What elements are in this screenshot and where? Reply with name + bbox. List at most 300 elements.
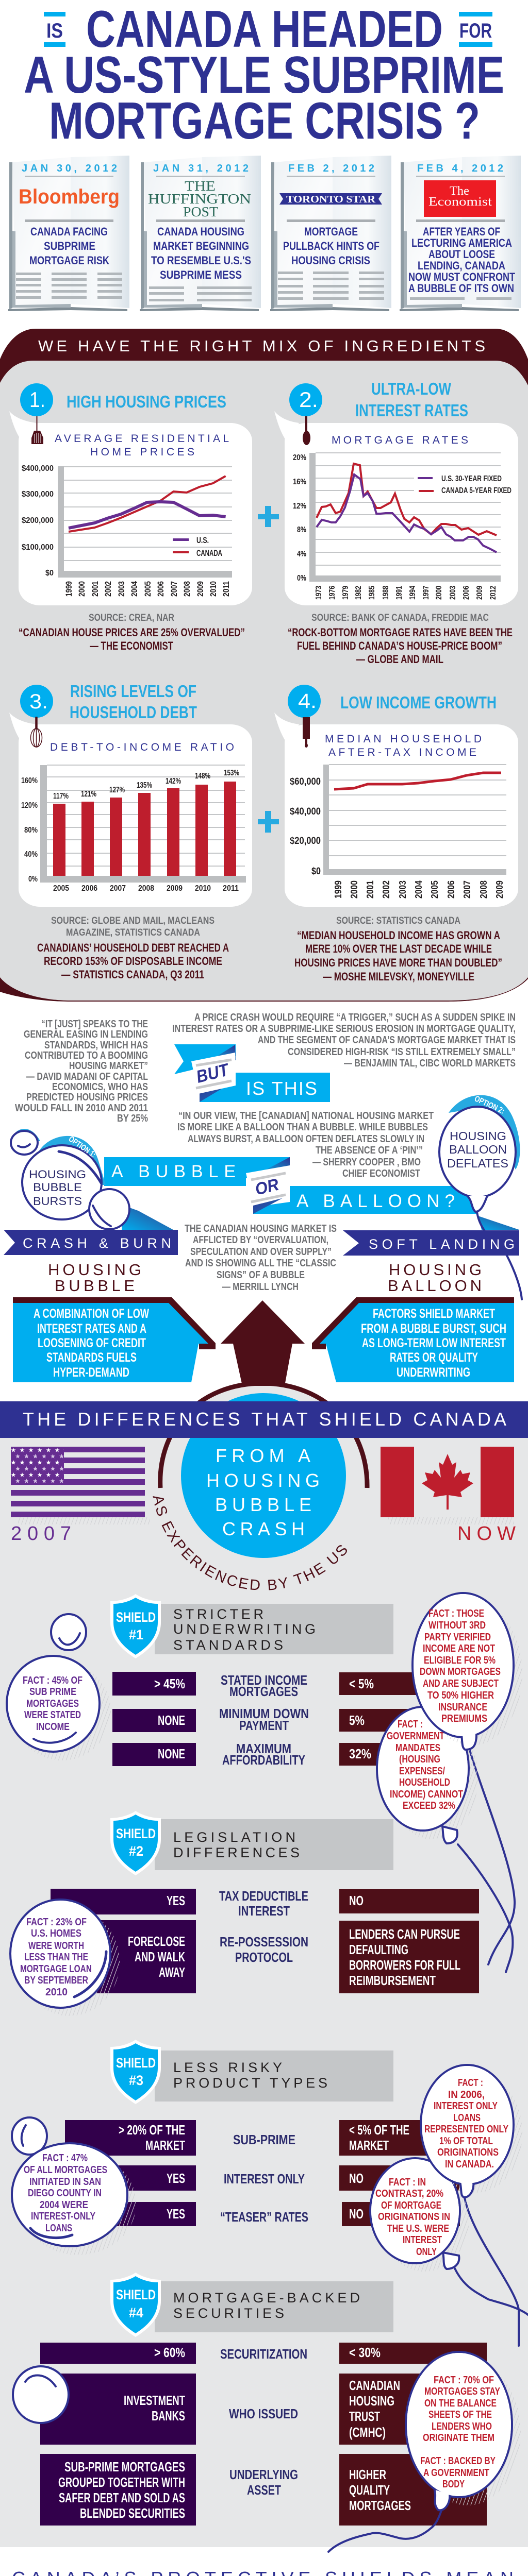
line chart: mortgage rates: 8% [297, 526, 306, 534]
chart panel 1: high housing prices [9, 383, 252, 652]
line chart: median income: 2005 [430, 880, 440, 899]
chart title: MORTGAGE RATES [332, 434, 468, 446]
callout: option 1 bubble crash and burn: HOUSING [29, 1168, 86, 1181]
table: shield 1 rows: MINIMUM DOWN [219, 1706, 309, 1721]
source and quote: CANADIANS’ HOUSEHOLD DEBT REACHED A [37, 941, 229, 954]
source and quote [37, 916, 229, 981]
table: shield 4 rows: (CMHC) [349, 2425, 386, 2440]
callout: fact in contrast balloon [370, 2158, 469, 2272]
panel: shield 1 header: STANDARDS [173, 1637, 283, 1653]
heading: housing balloon: BALLOON [388, 1277, 482, 1295]
callout: fact 45% balloon: INCOME [36, 1721, 70, 1733]
line chart: mortgage rates: U.S. 30-YEAR FIXED [441, 474, 502, 483]
heading: housing bubble [48, 1261, 141, 1295]
callout: fact 47% balloon: 2004 WERE [40, 2199, 88, 2211]
line chart: mortgage rates: 1985 [368, 586, 376, 600]
table: shield 2 rows: AWAY [159, 1964, 185, 1980]
panel: shield 3 header [110, 2040, 393, 2104]
table: shield 4 rows: BANKS [152, 2408, 185, 2424]
source and quote [288, 613, 513, 666]
quote: David Madani: CONTRIBUTED TO A BOOMING [25, 1050, 148, 1061]
callout: fact 70% balloon [328, 2352, 521, 2552]
bar chart: debt-to-income: 2006 [81, 884, 97, 893]
table: shield 3 rows: YES [167, 2171, 185, 2186]
ribbon: a bubble or a balloon: OR [253, 1175, 280, 1199]
table: shield 3 rows: “TEASER” RATES [220, 2209, 308, 2225]
callout: fact third party income balloon: PREMIUMS [441, 1713, 487, 1724]
callout: from a housing bubble crash: FROM A [216, 1445, 310, 1466]
line chart: home prices: 2008 [182, 581, 192, 597]
panel: newspaper Huffington Post: SUBPRIME MESS [160, 268, 242, 281]
chart panel 1: high housing prices: 1. [29, 387, 45, 412]
panel: newspaper Toronto Star: TORONTO STAR [286, 194, 376, 205]
table: shield 3 rows: < 5% OF THE [349, 2122, 409, 2138]
callout: option 2 balloon soft landing [343, 1094, 522, 1299]
bar chart: debt-to-income: 117% [53, 792, 69, 801]
icon: empty bubble [13, 2366, 69, 2423]
table: shield 2 rows: YES [167, 1893, 185, 1908]
heading: high housing prices: HIGH HOUSING PRICES [67, 392, 226, 411]
callout: option 2 balloon soft landing: HOUSING [450, 1129, 506, 1143]
source and quote: SOURCE: BANK OF CANADA, FREDDIE MAC [311, 613, 489, 623]
callout: fact 70% balloon: MORTGAGES STAY [424, 2386, 501, 2397]
panel: shield 2 header: SHIELD [116, 1826, 156, 1841]
callout: fact 70% balloon: FACT : BACKED BY [420, 2455, 496, 2467]
panel: ingredients arch [0, 329, 528, 1002]
icon: plus sign [258, 811, 279, 833]
quote: Sherry Cooper: — SHERRY COOPER , BMO [312, 1157, 421, 1168]
callout: fact government mandates balloon: (HOUSING [399, 1754, 440, 1765]
table: shield 3 rows: NO [349, 2206, 364, 2222]
panel: housing bubble description: A COMBINATION OF LOW [34, 1307, 149, 1321]
callout: option 1 bubble crash and burn: OPTION 1: [67, 1134, 97, 1160]
heading: ultra-low interest rates: ULTRA-LOW [371, 379, 452, 398]
callout: from a housing bubble crash: HOUSING [206, 1470, 320, 1491]
callout: fact third party income balloon: TO 50% HIGHER [427, 1690, 494, 1701]
quote: David Madani: ECONOMICS, WHO HAS [52, 1081, 148, 1093]
table: shield 1 rows [112, 1672, 422, 1768]
panel: housing bubble description: STANDARDS FUELS [46, 1350, 137, 1365]
table: shield 4 rows: CANADIAN [349, 2378, 400, 2393]
bar chart: debt-to-income [21, 765, 246, 893]
table: shield 2 rows: PROTOCOL [235, 1950, 293, 1965]
line chart: mortgage rates [293, 453, 517, 600]
bar chart: debt-to-income: 40% [24, 850, 38, 859]
callout: fact 70% balloon: SHEETS OF THE [428, 2409, 492, 2420]
callout: fact 70% balloon: FACT : 70% OF [434, 2375, 494, 2386]
line chart: home prices: 2010 [208, 581, 218, 597]
table: shield 4 rows: ASSET [247, 2482, 281, 2498]
icon: number 4 [288, 685, 321, 718]
callout: option 1 bubble crash and burn [4, 1129, 178, 1255]
heading: housing balloon: HOUSING [389, 1261, 482, 1279]
line chart: median income: 2009 [494, 880, 505, 899]
icon: plus sign [258, 506, 279, 527]
panel: housing balloon description [312, 1297, 514, 1382]
quote: Sherry Cooper [177, 1110, 434, 1179]
table: shield 1 rows: PAYMENT [239, 1718, 289, 1733]
bar chart: debt-to-income: 2010 [195, 884, 211, 893]
quote: Merrill Lynch [185, 1223, 337, 1293]
table: shield 2 rows: NO [349, 1893, 364, 1908]
panel: housing balloon description: RATES OR QUALITY [390, 1350, 478, 1365]
title [24, 1, 504, 150]
panel: newspaper The Economist: AFTER YEARS OF [423, 225, 500, 238]
callout: fact 23% balloon [10, 1900, 120, 2016]
table: shield 2 rows [51, 1888, 479, 1993]
line chart: median income: $0 [311, 866, 321, 877]
line chart: mortgage rates: 1979 [341, 586, 350, 600]
callout: fact government mandates balloon: FACT : [398, 1719, 423, 1730]
source and quote [19, 613, 245, 652]
table: shield 1 rows: NONE [158, 1713, 185, 1728]
callout: option 2 balloon soft landing: OPTION 2: [473, 1094, 506, 1116]
icon: Canadian flag [381, 1447, 514, 1524]
chart title: HOME PRICES [90, 446, 194, 458]
icon: whisk [31, 717, 42, 747]
panel: shield 3 header: SHIELD [116, 2055, 156, 2071]
chart title: DEBT-TO-INCOME RATIO [50, 741, 234, 753]
callout: fact third party income balloon: INSURANCE [438, 1702, 487, 1713]
line chart: home prices: 2005 [143, 581, 153, 597]
callout: option 1 bubble crash and burn: BURSTS [33, 1195, 82, 1208]
panel: newspaper Toronto Star: PULLBACK HINTS OF [283, 240, 380, 252]
panel: shield 3 header: LESS RISKY [173, 2060, 282, 2075]
quote: David Madani [15, 1019, 148, 1124]
line chart: home prices: $200,000 [22, 516, 54, 525]
callout: fact government mandates balloon: GOVERNMENT [387, 1731, 444, 1742]
chart title [325, 733, 482, 758]
line chart: home prices: $100,000 [22, 543, 54, 552]
quote: David Madani: PREDICTED HOUSING PRICES [26, 1092, 148, 1103]
ribbon: a bubble or a balloon [104, 1157, 478, 1214]
bar chart: debt-to-income: 148% [195, 772, 210, 781]
bar chart: debt-to-income: 2011 [223, 884, 239, 893]
callout: fact third party income balloon: ELIGIBLE FOR 5% [424, 1655, 496, 1666]
callout: option 1 bubble crash and burn: BUBBLE [33, 1181, 82, 1194]
table: shield 1 rows: AFFORDABILITY [222, 1752, 305, 1768]
callout: fact in 2006 balloon: 1% OF TOTAL [439, 2136, 493, 2147]
callout: fact 70% balloon: ORIGINATE THEM [423, 2432, 494, 2444]
line chart: mortgage rates: 2012 [489, 586, 498, 600]
callout: option 2 balloon soft landing: BALLOON [449, 1143, 507, 1156]
callout: fact 45% balloon: MORTGAGES [26, 1698, 79, 1709]
panel: shield 3 header: #3 [129, 2073, 143, 2088]
table: shield 4 rows: TRUST [349, 2409, 380, 2424]
quote: David Madani: STANDARDS, WHICH HAS [44, 1040, 148, 1051]
panel: shield 1 header: SHIELD [116, 1609, 156, 1625]
callout: fact third party income balloon: FACT : THOSE [428, 1608, 484, 1619]
line chart: median income: 2000 [349, 880, 359, 899]
table: shield 2 rows: DEFAULTING [349, 1942, 408, 1957]
line chart: home prices [22, 464, 232, 597]
quote: David Madani: — DAVID MADANI OF CAPITAL [26, 1071, 148, 1082]
table: shield 2 rows: INTEREST [238, 1903, 290, 1919]
callout: fact 47% balloon: LOANS [45, 2223, 72, 2234]
line chart: home prices: $400,000 [22, 464, 54, 473]
panel: newspaper The Economist: The [450, 184, 469, 198]
table: shield 2 rows: AND WALK [135, 1949, 185, 1964]
panel: newspaper Huffington Post: THE [185, 178, 216, 194]
callout: from a housing bubble crash: CRASH [222, 1518, 305, 1539]
bar chart: debt-to-income: 127% [109, 786, 125, 794]
line chart: mortgage rates: 1988 [382, 586, 390, 600]
panel: shield 1 header: #1 [129, 1627, 143, 1642]
chart title: MEDIAN HOUSEHOLD [325, 733, 482, 745]
panel: shield 4 header: SHIELD [116, 2287, 156, 2302]
callout: fact 70% balloon: A GOVERNMENT [423, 2467, 489, 2479]
chart panel 2: ultra-low interest rates [274, 379, 518, 666]
quote: David Madani: BY 25% [117, 1113, 148, 1124]
label: 2007: 2007 [11, 1523, 71, 1545]
bar chart: debt-to-income: 153% [224, 769, 239, 777]
table: shield 1 rows: MAXIMUM [236, 1741, 291, 1756]
icon: spatula [31, 416, 43, 444]
line chart: median income: 2006 [446, 880, 456, 899]
panel: newspaper Huffington Post: MARKET BEGINNING [153, 240, 249, 252]
line chart: median income: $20,000 [290, 836, 321, 846]
panel: newspaper Bloomberg: CANADA FACING [30, 225, 108, 238]
line chart: mortgage rates: 20% [293, 453, 306, 462]
table: shield 4 rows [40, 2343, 487, 2526]
callout: fact 45% balloon: WERE STATED [24, 1709, 81, 1721]
panel: ingredients arch: WE HAVE THE RIGHT MIX OF INGREDIENTS [38, 337, 485, 355]
line chart: median income: 2001 [365, 880, 375, 899]
line chart: mortgage rates: 2009 [475, 586, 484, 600]
heading: rising levels of household debt: HOUSEHOLD DEBT [70, 703, 197, 722]
quote: Merrill Lynch: THE CANADIAN HOUSING MARKET IS [185, 1223, 337, 1234]
table: shield 1 rows: < 5% [349, 1676, 374, 1691]
line chart: mortgage rates: 2000 [435, 586, 443, 600]
panel: newspaper The Economist [400, 156, 521, 311]
chart title [55, 433, 229, 458]
panel: shield 1 header: UNDERWRITING [173, 1621, 316, 1637]
table: shield 2 rows: RE-POSSESSION [220, 1934, 308, 1950]
line chart: mortgage rates: 0% [297, 574, 306, 583]
panel: newspaper The Economist: ABOUT LOOSE [428, 248, 495, 261]
panel: housing bubble description: HYPER-DEMAND [53, 1365, 129, 1380]
quote: Merrill Lynch: AND IS SHOWING ALL THE “CLASSIC [185, 1258, 336, 1269]
chart title: AFTER-TAX INCOME [328, 747, 476, 758]
callout: fact 47% balloon: DIEGO COUNTY IN [28, 2188, 102, 2199]
bar chart: debt-to-income: 2008 [138, 884, 154, 893]
icon: number 3 [20, 685, 53, 718]
quote: David Madani: “IT [JUST] SPEAKS TO THE [41, 1019, 148, 1030]
callout: fact 23% balloon: FACT : 23% OF [26, 1917, 87, 1928]
quote: Sherry Cooper: IS MORE LIKE A BALLOON THAN A BUBBLE. WHILE BUBBLES [177, 1122, 428, 1133]
icon: small bubble [11, 1129, 40, 1155]
panel: differences background [0, 1438, 528, 2547]
icon: rolling pin [303, 717, 310, 748]
panel: newspaper Bloomberg: MORTGAGE RISK [29, 254, 109, 267]
callout: fact third party income balloon: WITHOUT 3RD [428, 1620, 486, 1631]
callout: fact government mandates balloon: EXCEED 32% [403, 1800, 455, 1811]
callout: fact third party income balloon: PARTY VERIFIED [424, 1632, 491, 1643]
panel: shield 4 header: #4 [129, 2305, 143, 2320]
heading: housing bubble: BUBBLE [55, 1277, 135, 1295]
callout: fact in 2006 balloon: ORIGINATIONS [437, 2147, 499, 2158]
table: shield 1 rows: > 45% [154, 1676, 185, 1691]
quote: David Madani: WOULD FALL IN 2010 AND 2011 [15, 1103, 148, 1114]
line chart: median income: 2003 [398, 880, 408, 899]
line chart: median income: 2002 [381, 880, 391, 899]
callout: fact in contrast balloon: ORIGINATIONS IN [378, 2211, 450, 2223]
banner: the differences that shield Canada [0, 1401, 528, 1438]
panel: newspaper Bloomberg: Bloomberg [19, 185, 120, 208]
line chart: home prices: 2001 [90, 581, 100, 597]
quote: Sherry Cooper: “IN OUR VIEW, THE [CANADIAN] NATIONAL HOUSING MARKET [178, 1110, 434, 1122]
quote: Sherry Cooper: CHIEF ECONOMIST [342, 1168, 420, 1179]
callout: fact government mandates balloon: MANDATES [395, 1742, 440, 1754]
quote: Sherry Cooper: ALWAYS BURST, A BALLOON OFTEN DEFLATES SLOWLY IN [188, 1133, 424, 1145]
callout: fact 47% balloon: FACT : 47% [42, 2153, 88, 2164]
panel: shield 2 header: DIFFERENCES [173, 1845, 300, 1860]
source and quote: — GLOBE AND MAIL [356, 653, 443, 666]
callout: strings for right balloons [458, 1750, 515, 1972]
panel: newspaper Toronto Star: FEB 2, 2012 [288, 163, 374, 174]
callout: fact government mandates balloon [377, 1707, 478, 1843]
panel: shield 1 header: STRICTER [173, 1606, 263, 1622]
panel: shield 2 header: #2 [129, 1843, 143, 1859]
chart panel 3: household debt: 3. [29, 690, 48, 713]
table: shield 4 rows: SAFER DEBT AND SOLD AS [59, 2490, 185, 2505]
callout: fact 45% balloon: SUB PRIME [29, 1686, 76, 1698]
chart title: AVERAGE RESIDENTIAL [55, 433, 229, 445]
heading: rising levels of household debt: RISING LEVELS OF [70, 682, 196, 701]
callout: fact 45% balloon: FACT : 45% OF [23, 1675, 82, 1686]
line chart: mortgage rates: 1982 [354, 586, 363, 600]
source and quote: “CANADIAN HOUSE PRICES ARE 25% OVERVALUED” [19, 626, 245, 639]
panel: newspaper Toronto Star: HOUSING CRISIS [291, 254, 370, 267]
panel: newspaper Huffington Post: CANADA HOUSING [157, 225, 244, 238]
panel: housing bubble description [13, 1297, 216, 1382]
callout: option 2 balloon soft landing: DEFLATES [447, 1157, 508, 1170]
line chart: home prices: 2002 [103, 581, 113, 597]
table: shield 3 rows: INTEREST ONLY [224, 2171, 305, 2187]
callout: fact government mandates balloon: EXPENSES/ [399, 1766, 445, 1777]
callout: fact 47% balloon: INTEREST-ONLY [31, 2211, 96, 2222]
panel: shield 4 header [110, 2273, 393, 2337]
panel: newspaper Toronto Star: MORTGAGE [304, 225, 358, 238]
chart panel 2: ultra-low interest rates: 2. [299, 387, 318, 412]
callout: fact 47% balloon: OF ALL MORTGAGES [24, 2164, 107, 2176]
callout: fact 70% balloon: LENDERS WHO [432, 2421, 492, 2432]
line chart: home prices: 2003 [117, 581, 126, 597]
callout: fact in contrast balloon: THE U.S. WERE [387, 2223, 449, 2234]
bar chart: debt-to-income: 0% [28, 875, 38, 884]
heading: housing balloon [388, 1261, 482, 1295]
table: shield 2 rows: TAX DEDUCTIBLE [219, 1888, 308, 1904]
quote: Merrill Lynch: SIGNS” OF A BUBBLE [217, 1269, 305, 1281]
callout: fact third party income balloon [412, 1593, 522, 1750]
callout: fact in contrast balloon: INTEREST [403, 2234, 442, 2246]
source and quote: MAGAZINE, STATISTICS CANADA [66, 927, 200, 938]
table: shield 4 rows: SUB-PRIME MORTGAGES [64, 2459, 185, 2475]
line chart: home prices: $300,000 [22, 490, 54, 499]
table: shield 4 rows: HOUSING [349, 2393, 394, 2409]
bar chart: debt-to-income: 120% [21, 801, 38, 810]
chart panel 4: low income growth: 4. [298, 690, 317, 713]
callout: strings for shield 3 balloons [455, 2197, 528, 2346]
ribbon: but is this: BUT [194, 1060, 232, 1087]
panel: newspaper Huffington Post: TO RESEMBLE U.S.'S [151, 254, 251, 267]
source and quote: SOURCE: STATISTICS CANADA [336, 916, 460, 926]
callout: fact 23% balloon: LESS THAN THE [24, 1952, 88, 1963]
line chart: home prices: 2011 [221, 581, 231, 597]
quote: Merrill Lynch: AFFLICTED BY “OVERVALUATION, [193, 1234, 328, 1246]
callout: fact in 2006 balloon: IN 2006, [448, 2089, 485, 2100]
bar chart: debt-to-income: 80% [24, 826, 38, 835]
title: IS [46, 20, 63, 42]
curved text: as experienced by the us: AS EXPERIENCED BY THE US [153, 1496, 347, 1590]
table: shield 4 rows: QUALITY [349, 2482, 390, 2498]
table: shield 3 rows: SUB-PRIME [233, 2132, 295, 2147]
bar chart: debt-to-income: 2009 [167, 884, 183, 893]
callout: fact in 2006 balloon: LOANS [453, 2112, 481, 2124]
line chart: home prices: U.S. [196, 535, 209, 545]
source and quote: SOURCE: GLOBE AND MAIL, MACLEANS [51, 916, 214, 926]
panel: shield 2 header: LEGISLATION [173, 1829, 295, 1845]
chart panel 4: low income growth [274, 685, 518, 983]
heading: ultra-low interest rates: INTEREST RATES [355, 401, 468, 420]
callout: fact 23% balloon: U.S. HOMES [31, 1928, 81, 1939]
table: shield 4 rows: INVESTMENT [124, 2393, 185, 2408]
bar chart: debt-to-income: 142% [166, 777, 181, 786]
callout: fact third party income balloon: DOWN MORTGAGES [420, 1666, 501, 1677]
icon: US flag [11, 1447, 150, 1524]
heading: rising levels of household debt [70, 682, 197, 722]
quote: David Madani: GENERAL EASING IN LENDING [24, 1029, 148, 1040]
table: shield 3 rows: YES [167, 2206, 185, 2222]
table: shield 4 rows: SECURITIZATION [220, 2346, 307, 2362]
line chart: home prices: CANADA [196, 548, 222, 558]
callout: fact in contrast balloon: OF MORTGAGE [381, 2200, 441, 2211]
callout: fact in 2006 balloon: FACT : [458, 2077, 483, 2089]
quote: David Madani: HOUSING MARKET” [69, 1060, 148, 1072]
icon: number 2 [289, 383, 322, 416]
ribbon: but is this: IS THIS [246, 1078, 317, 1099]
table: shield 2 rows: LENDERS CAN PURSUE [349, 1926, 460, 1942]
table: shield 3 rows: NO [349, 2171, 364, 2186]
ribbon: a bubble or a balloon: A BALLOON? [296, 1191, 455, 1211]
panel: newspaper Bloomberg: SUBPRIME [44, 240, 95, 252]
table: shield 4 rows: MORTGAGES [349, 2498, 411, 2513]
callout: fact 45% balloon [7, 1614, 111, 1760]
line chart: home prices: 1999 [64, 581, 74, 597]
table: shield 2 rows: REIMBURSEMENT [349, 1973, 436, 1988]
table: shield 2 rows: BORROWERS FOR FULL [349, 1957, 460, 1973]
chart panel 3: household debt [9, 682, 252, 981]
callout: fact 23% balloon: 2010 [45, 1987, 68, 1998]
table: shield 4 rows: GROUPED TOGETHER WITH [58, 2475, 185, 2490]
callout: fact 23% balloon: WERE WORTH [28, 1940, 84, 1952]
panel: shield 2 header [110, 1811, 393, 1875]
line chart: median income: 1999 [333, 880, 343, 899]
bar chart: debt-to-income: 2007 [110, 884, 126, 893]
panel: newspaper The Economist: FEB 4, 2012 [417, 163, 503, 174]
source and quote: — STATISTICS CANADA, Q3 2011 [61, 968, 204, 981]
bar chart: debt-to-income: 2005 [53, 884, 69, 893]
line chart: mortgage rates: 12% [293, 502, 306, 511]
callout: fact in contrast balloon: ONLY [416, 2246, 437, 2258]
table: shield 4 rows: WHO ISSUED [229, 2406, 298, 2421]
bar chart: debt-to-income: 135% [137, 781, 152, 790]
source and quote: — THE ECONOMIST [90, 639, 173, 652]
line chart: home prices: $0 [45, 569, 54, 578]
table: shield 4 rows: HIGHER [349, 2467, 386, 2482]
callout: from a housing bubble crash [206, 1445, 320, 1539]
line chart: mortgage rates: 4% [297, 550, 306, 558]
